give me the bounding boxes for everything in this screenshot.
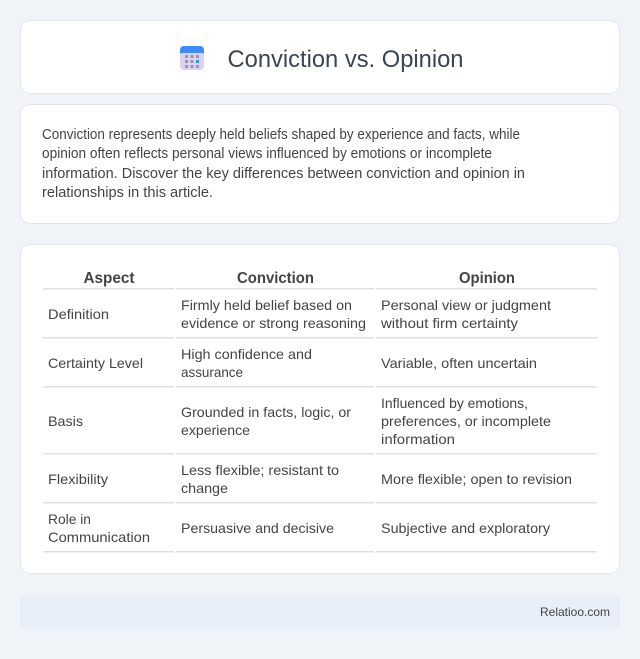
row: role in communication: Role in [48,511,91,527]
intro paragraph: information. Discover the key differences between conviction and opinion in [42,166,525,182]
row: basis: Grounded in facts, logic, or [181,404,351,420]
row: definition [48,297,551,331]
intro paragraph: relationships in this article. [42,185,213,201]
row: role in communication: Subjective and exploratory [381,520,550,536]
row: basis: preferences, or incomplete [381,413,551,429]
row: flexibility: change [181,480,228,496]
panel: intro card [20,104,620,224]
row: definition: Definition [48,306,109,322]
intro paragraph: opinion often reflects personal views influenced by emotions or incomplete [42,146,492,162]
row: certainty level: Certainty Level [48,355,143,371]
intro paragraph [42,127,525,201]
table header [84,270,515,287]
row: basis: information [381,431,455,447]
row: flexibility: Flexibility [48,471,108,487]
row: flexibility: Less flexible; resistant to [181,462,339,478]
row: role in communication [48,511,550,545]
row: certainty level [48,346,537,380]
row: flexibility [48,462,572,496]
row: definition: evidence or strong reasoning [181,315,366,331]
row: basis: experience [181,422,250,438]
row: role in communication: Communication [48,529,150,545]
row: certainty level: Variable, often uncertain [381,355,537,371]
panel: comparison table [20,244,620,574]
row: definition: without firm certainty [380,315,518,331]
table header: Aspect [84,270,135,287]
row: definition: Firmly held belief based on [181,297,352,313]
intro paragraph: Conviction represents deeply held beliefs shaped by experience and facts, while [42,127,520,143]
table header: Opinion [459,270,515,287]
table header: Conviction [237,270,314,287]
row: certainty level: assurance [181,364,243,380]
row: basis [48,395,551,447]
row: definition: Personal view or judgment [381,297,551,313]
row: basis: Basis [48,413,83,429]
row: role in communication: Persuasive and decisive [181,520,334,536]
footer [20,595,620,629]
panel: title card [20,20,620,94]
title: Conviction vs. Opinion [228,46,464,73]
icon: calendar [180,46,204,70]
footer: Relatioo.com [540,605,610,619]
row: flexibility: More flexible; open to revision [381,471,572,487]
row: certainty level: High confidence and [181,346,312,362]
row: basis: Influenced by emotions, [381,395,528,411]
